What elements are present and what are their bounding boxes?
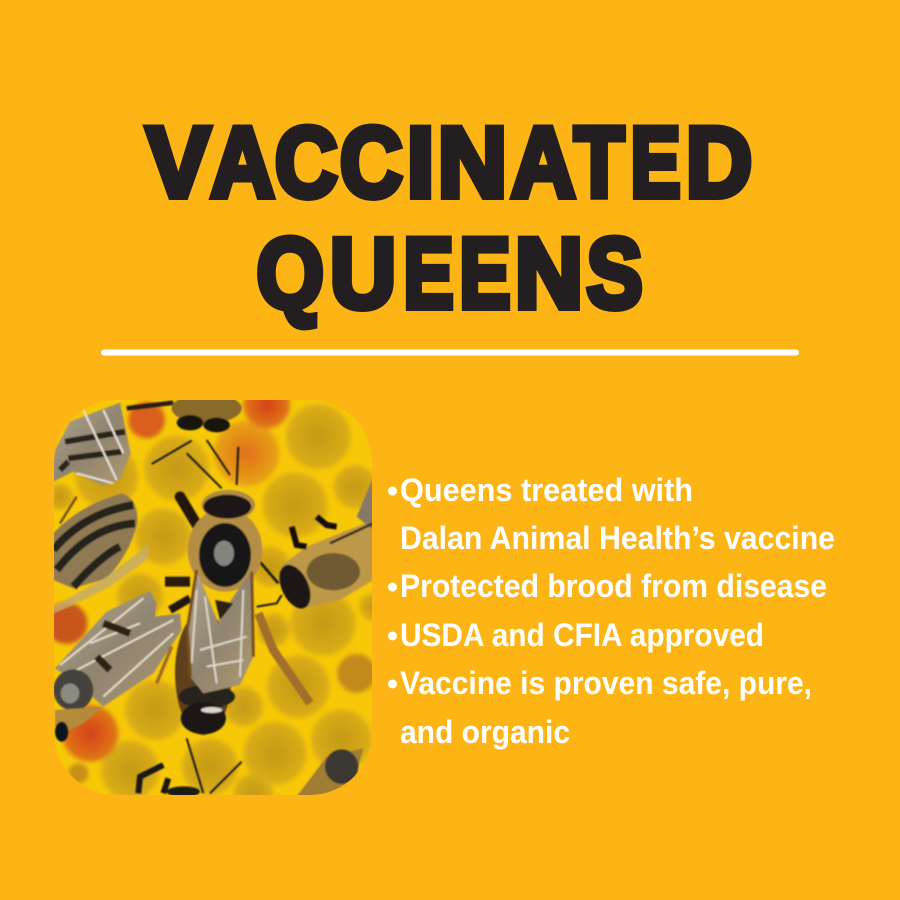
title line 2: E <box>404 217 454 329</box>
title line 1: A <box>511 107 575 218</box>
divider line <box>101 350 799 356</box>
bullet 2: Protected brood from disease <box>400 568 827 604</box>
title line 2: U <box>330 219 396 329</box>
queen bee <box>157 447 310 735</box>
bullet 4 <box>388 665 812 750</box>
photo: queen bee on honeycomb <box>54 400 372 795</box>
bullet 1: Dalan Animal Health’s vaccine <box>400 520 835 556</box>
title line 2: Q <box>257 218 324 329</box>
infographic <box>54 124 834 795</box>
title line 1 <box>146 106 752 218</box>
left striped bee <box>53 493 150 613</box>
bullet 1 <box>388 472 835 556</box>
bullet 1: Queens treated with <box>400 472 693 508</box>
title line 2: S <box>587 219 643 329</box>
title line 1: E <box>630 106 681 218</box>
top-left bee <box>53 403 173 486</box>
top bee <box>152 393 242 475</box>
title line 1: V <box>146 107 210 218</box>
bullet 3: USDA and CFIA approved <box>400 617 764 653</box>
title line 1: C <box>275 107 337 218</box>
title line 1: D <box>686 108 752 218</box>
bullet list <box>388 472 835 750</box>
bullet 4: Vaccine is proven safe, pure, <box>400 665 812 701</box>
title line 1: N <box>438 107 507 218</box>
title line 1: T <box>574 108 624 218</box>
title line 1: A <box>211 107 274 218</box>
title line 2: N <box>515 218 583 329</box>
bullet 4: and organic <box>400 714 570 750</box>
bottom bees <box>138 738 363 797</box>
title line 2: E <box>459 218 511 329</box>
title line 2 <box>257 217 643 329</box>
title line 1: C <box>340 107 402 218</box>
right bee <box>257 477 373 613</box>
title line 1: I <box>407 108 434 218</box>
lower-left bee <box>53 591 182 742</box>
title <box>146 106 752 329</box>
